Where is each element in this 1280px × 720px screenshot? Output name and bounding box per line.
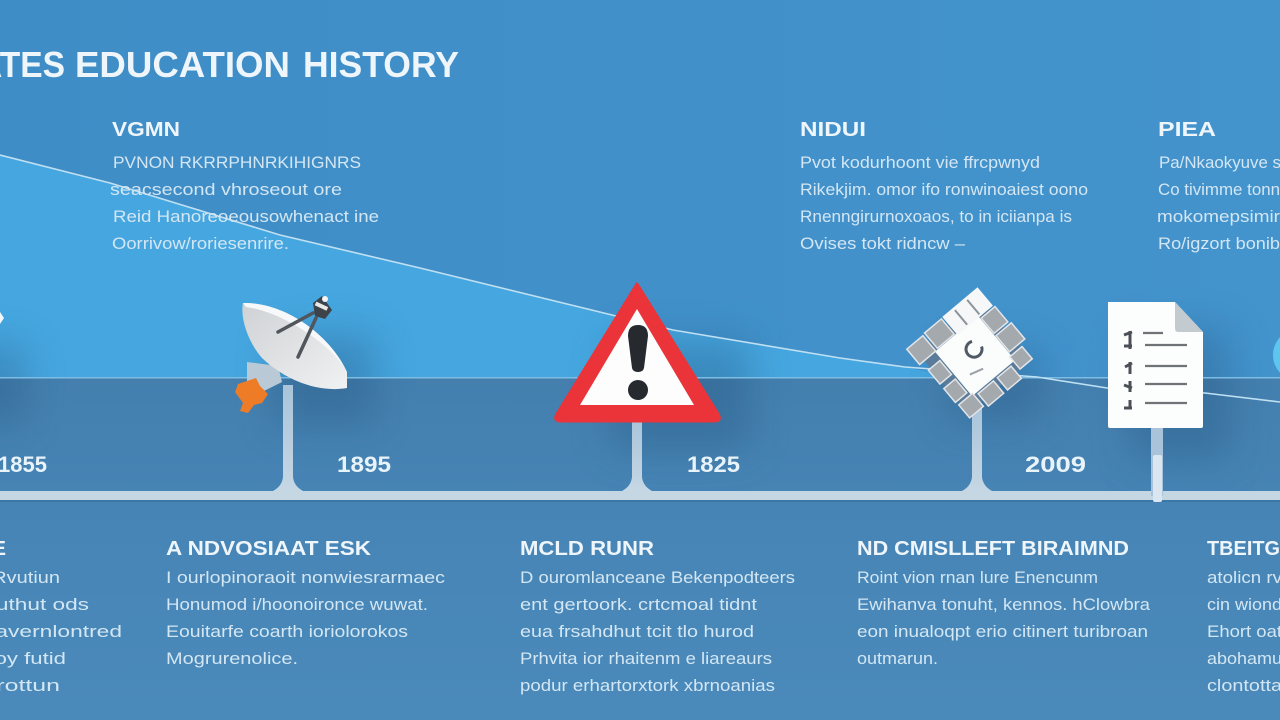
- text block: ND CMISLLEFT BIRAIMND: outmarun.: [857, 650, 938, 668]
- text block: TBEITG: cin wiond: [1207, 596, 1280, 614]
- icon: circuit chip: [905, 285, 1043, 423]
- text block: NIDUI: NIDUI: [800, 119, 866, 141]
- text block: A NDVOSIAAT ESK: I ourlopinoraoit nonwiesrarmaec: [166, 569, 445, 587]
- title: EDUCATION: [75, 44, 290, 85]
- text block: ND CMISLLEFT BIRAIMND: Ewihanva tonuht, kennos. hClowbra: [857, 596, 1151, 614]
- icon: right edge circle: [1273, 329, 1280, 381]
- text block: MCLD RUNR: [520, 538, 795, 695]
- year labels: 2009: [1025, 452, 1086, 477]
- text block: TBEITG: abohamu: [1207, 650, 1280, 668]
- text block: A NDVOSIAAT ESK: Honumod i/hoonoironce wuwat.: [166, 596, 428, 614]
- stem: document: [1151, 426, 1163, 502]
- title: HISTORY: [303, 44, 459, 85]
- text block: PIEA: PIEA: [1158, 119, 1216, 141]
- text block: A NDVOSIAAT ESK: A NDVOSIAAT ESK: [166, 538, 372, 560]
- text block: NIDUI: Rikekjim. omor ifo ronwinoaiest oono: [800, 181, 1088, 199]
- text block: PIEA: mokomepsimir: [1157, 208, 1280, 226]
- text block: VGMN: seacsecond vhroseout ore: [110, 181, 342, 199]
- text block: TBEITG: clontotta: [1207, 677, 1280, 695]
- text block: MCLD RUNR: D ouromlanceane Bekenpodteers: [520, 569, 795, 587]
- text block: A NDVOSIAAT ESK: [166, 538, 445, 668]
- trend line: [0, 155, 1280, 402]
- year labels: 1825: [687, 452, 740, 477]
- stem: 1925: [620, 420, 654, 492]
- text block: MCLD RUNR: eua frsahdhut tcit tlo hurod: [520, 623, 754, 641]
- text block: NIDUI: Rnenngirurnoxoaos, to in iciianpa is: [800, 208, 1072, 226]
- text block: column E: [0, 538, 122, 695]
- background upper panel: [0, 0, 1280, 378]
- timeline bar: [0, 491, 1280, 502]
- stem: 1895: [271, 385, 305, 492]
- text block: VGMN: [110, 119, 379, 253]
- text block: ND CMISLLEFT BIRAIMND: Roint vion rnan lure Enencunm: [857, 569, 1098, 587]
- background lower panel: [0, 378, 1280, 720]
- text block: NIDUI: Pvot kodurhoont vie ffrcpwnyd: [800, 154, 1040, 172]
- icon: satellite dish: [235, 296, 347, 413]
- text block: ND CMISLLEFT BIRAIMND: eon inualoqpt erio citinert turibroan: [857, 623, 1148, 641]
- icon: warning triangle: [556, 284, 719, 421]
- text block: VGMN: PVNON RKRRPHNRKIHIGNRS: [113, 154, 361, 172]
- text block: MCLD RUNR: MCLD RUNR: [520, 538, 655, 560]
- icon: document checklist: [1108, 302, 1203, 428]
- year labels: [0, 452, 1086, 477]
- text block: NIDUI: Ovises tokt ridncw –: [800, 235, 966, 253]
- text block: TBEITG: atolicn rv: [1207, 569, 1280, 587]
- text block: TBEITG: TBEITG: [1207, 538, 1280, 560]
- text block: MCLD RUNR: ent gertoork. crtcmoal tidnt: [520, 596, 757, 614]
- text block: VGMN: VGMN: [112, 119, 180, 141]
- text block: A NDVOSIAAT ESK: Mogrurenolice.: [166, 650, 298, 668]
- stem: 2009: [960, 405, 994, 492]
- horizon line: [0, 377, 1280, 378]
- light area under trend line: [0, 155, 960, 378]
- year labels: 1895: [337, 452, 391, 477]
- text block: ND CMISLLEFT BIRAIMND: [857, 538, 1151, 668]
- text block: VGMN: Reid Hanoreoeousowhenact ine: [113, 208, 379, 226]
- text block: A NDVOSIAAT ESK: Eouitarfe coarth ioriolorokos: [166, 623, 408, 641]
- text block: PIEA: Co tivimme tonn: [1158, 181, 1280, 199]
- text block: PIEA: Ro/igzort bonib: [1158, 235, 1280, 253]
- text block: PIEA: [1157, 119, 1280, 253]
- text block: VGMN: Oorrivow/roriesenrire.: [112, 235, 289, 253]
- icon drop shadows: [0, 330, 1230, 460]
- text block: ND CMISLLEFT BIRAIMND: ND CMISLLEFT BIRAIMND: [857, 538, 1129, 560]
- text block: TBEITG: [1207, 538, 1280, 695]
- icon: left edge marker: [0, 312, 4, 324]
- text block: MCLD RUNR: Prhvita ior rhaitenm e liareaurs: [520, 650, 772, 668]
- text block: TBEITG: Ehort oat: [1207, 623, 1280, 641]
- text block: MCLD RUNR: podur erhartorxtork xbrnoanias: [520, 677, 775, 695]
- text block: NIDUI: [800, 119, 1088, 253]
- title: [0, 44, 459, 85]
- text block: PIEA: Pa/Nkaokyuve s: [1159, 154, 1280, 172]
